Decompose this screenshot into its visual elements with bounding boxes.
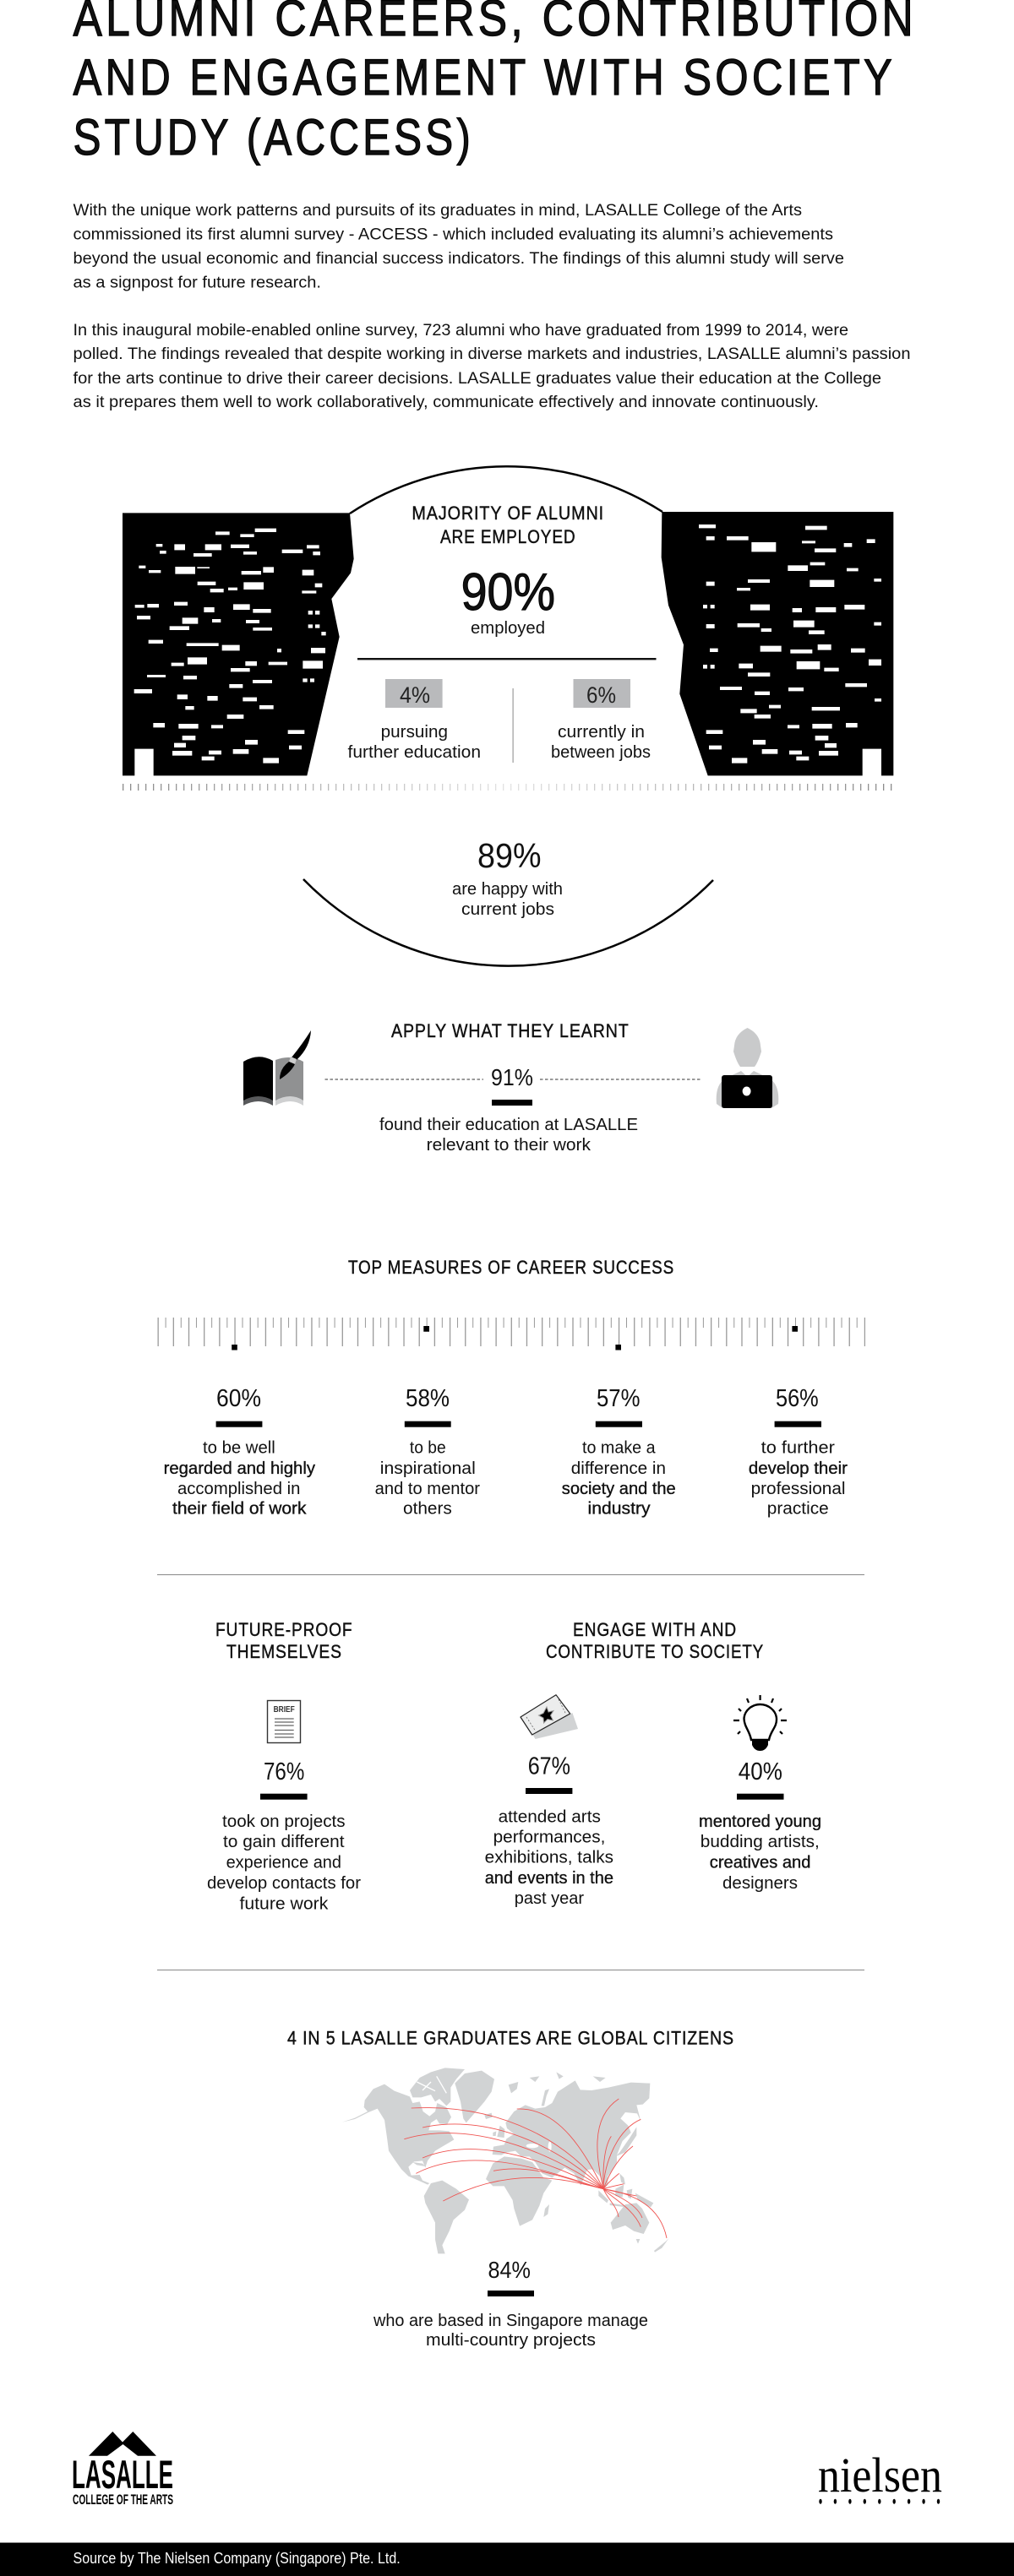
icon: person with laptop [717,1028,778,1108]
panel: global citizens [287,2028,734,2350]
stat: 4% further education: pursuing [381,723,448,742]
ruler with markers [157,1323,865,1350]
stat: 60%: their field of work [172,1500,308,1519]
intro paragraph 1: commissioned its first alumni survey - ACCESS - which included evaluating its alumni’s achievements [73,226,833,243]
stat: 84%: multi-country projects [426,2331,596,2350]
stat: 90% employed: 90% [461,563,555,622]
footer bar with source [0,2542,1014,2576]
intro paragraph 2: polled. The findings revealed that despite working in diverse markets and industries, LASALLE alumni’s passion [73,345,911,363]
panel: employment buildings [123,466,893,966]
stat: 90% employed: employed [471,619,545,638]
heading: future-proof themselves: THEMSELVES [226,1641,342,1662]
stat: 6% between jobs: between jobs [551,743,651,762]
stat: 56%: professional [751,1480,845,1498]
stat: 57%: difference in [571,1459,666,1478]
stat: 76%: experience and [226,1854,341,1872]
title: STUDY (ACCESS) [73,109,474,166]
stat: 76%: future work [240,1895,329,1914]
stat: 60%: 60% [216,1385,261,1412]
icon: brief document [267,1701,301,1743]
logo: LASALLE College of the Arts: LASALLE [72,2453,173,2497]
stat: 4% further education [348,679,481,762]
stat: 57%: to make a [582,1439,656,1458]
panel: engage with and contribute to society [485,1619,821,1908]
stat: 84% [373,2257,648,2350]
intro paragraph 2 [73,322,911,411]
logo: LASALLE College of the Arts: COLLEGE OF THE ARTS [73,2492,173,2508]
stat: 67%: 67% [528,1753,570,1780]
stat: 60%: accomplished in [177,1480,300,1498]
arc: bottom of circle [303,879,713,966]
intro paragraph 2: as it prepares them well to work collaboratively, communicate effectively and innovate continuously. [73,394,819,411]
stat: 84%: 84% [488,2257,531,2283]
panel: future-proof themselves [207,1619,361,1914]
stat: 67%: and events in the [485,1869,613,1888]
flight lines from Singapore [404,2099,667,2238]
stat: 67%: past year [515,1889,584,1908]
stat: 67%: attended arts [499,1808,601,1827]
intro paragraph 2: In this inaugural mobile-enabled online survey, 723 alumni who have graduated from 1999 to 2014, were [73,322,848,340]
stat: 89% happy: are happy with [452,880,563,899]
intro paragraph 2: for the arts continue to drive their career decisions. LASALLE graduates value their education at the College [73,370,881,388]
stat: 4% further education: further education [348,743,481,762]
stat: 91%: relevant to their work [427,1136,592,1155]
stat: 56% [749,1385,848,1519]
stat: 58% [375,1385,480,1519]
title [73,0,917,166]
stat: 76%: develop contacts for [207,1874,361,1893]
stat: 56%: 56% [776,1385,819,1412]
heading: future-proof themselves: FUTURE-PROOF [215,1619,352,1640]
intro paragraph 1: With the unique work patterns and pursuits of its graduates in mind, LASALLE College of the Arts [73,202,802,220]
icon: light bulb [733,1695,787,1751]
stat: 60% [164,1385,315,1519]
stat: 60%: to be well [203,1439,275,1458]
heading: engage with society [546,1619,764,1662]
heading: engage with society: CONTRIBUTE TO SOCIETY [546,1641,764,1662]
stat: 67%: exhibitions, talks [485,1849,613,1867]
stat: 57%: society and the [562,1480,676,1498]
stat: 58%: others [403,1500,452,1519]
heading: top measures: TOP MEASURES OF CAREER SUCCESS [348,1257,674,1278]
stat: 40% [699,1758,821,1893]
stat: 58%: 58% [406,1385,450,1412]
stat: 40%: creatives and [710,1854,810,1872]
stat: 40%: 40% [739,1758,782,1785]
stat: 57% [562,1385,676,1519]
heading: engage with society: ENGAGE WITH AND [573,1619,737,1640]
stat: 91%: found their education at LASALLE [379,1116,638,1134]
icon: tickets [521,1695,578,1739]
building: right [662,512,893,775]
stat: 89% happy: current jobs [461,900,554,919]
stat: 76%: 76% [264,1758,304,1785]
intro paragraph 1: as a signpost for future research. [73,274,321,292]
stat: 4% further education: 4% [400,682,430,708]
stat: 40%: mentored young [699,1812,821,1831]
stat: 91%: 91% [491,1064,533,1090]
stat: 60%: regarded and highly [164,1459,315,1478]
stat: 58%: and to mentor [375,1480,480,1498]
stat: 6% between jobs: 6% [586,682,616,708]
stat: 57%: industry [588,1500,651,1519]
panel: top measures of career success [157,1257,865,1519]
stat: 76%: took on projects [222,1812,346,1831]
logo: LASALLE College of the Arts [72,2432,173,2508]
stat: 84%: who are based in Singapore manage [373,2312,648,2330]
logo: nielsen: nielsen [818,2448,942,2503]
footer bar with source: Source by The Nielsen Company (Singapore) Pte. Ltd. [73,2550,401,2567]
stat: 56%: to further [761,1439,835,1458]
icon: book and paintbrush [243,1030,311,1106]
building: left [123,513,354,775]
stat: 91% [379,1064,638,1155]
heading: majority employed: ARE EMPLOYED [440,526,576,547]
stat: 56%: practice [767,1500,829,1519]
stat: 67% [485,1753,613,1908]
stat: 89% happy [452,836,563,919]
panel: apply what they learnt [243,1020,778,1155]
stat: 76% [207,1758,361,1914]
arc: top of circle [350,466,662,514]
stat: 58%: inspirational [380,1459,476,1478]
stat: 67%: performances, [493,1829,605,1847]
heading: majority employed: MAJORITY OF ALUMNI [412,503,604,524]
heading: global citizens: 4 IN 5 LASALLE GRADUATES ARE GLOBAL CITIZENS [287,2028,734,2049]
stat: 56%: develop their [749,1459,848,1478]
stat: 6% between jobs: currently in [558,723,645,742]
stat: 40%: designers [722,1874,798,1893]
heading: apply what they learnt: APPLY WHAT THEY LEARNT [391,1020,630,1041]
icon: brief document: BRIEF [274,1705,295,1715]
stat: 58%: to be [410,1439,446,1458]
intro paragraph 1 [73,202,844,292]
heading: majority employed [412,503,604,547]
stat: 6% between jobs [551,679,651,762]
stat: 40%: budding artists, [701,1833,820,1851]
stat: 57%: 57% [597,1385,641,1412]
stat: 76%: to gain different [223,1833,345,1851]
world map [342,2068,669,2253]
stat: 89% happy: 89% [477,836,541,875]
intro paragraph 1: beyond the usual economic and financial success indicators. The findings of this alumni study will serve [73,250,844,268]
heading: future-proof themselves [215,1619,352,1662]
